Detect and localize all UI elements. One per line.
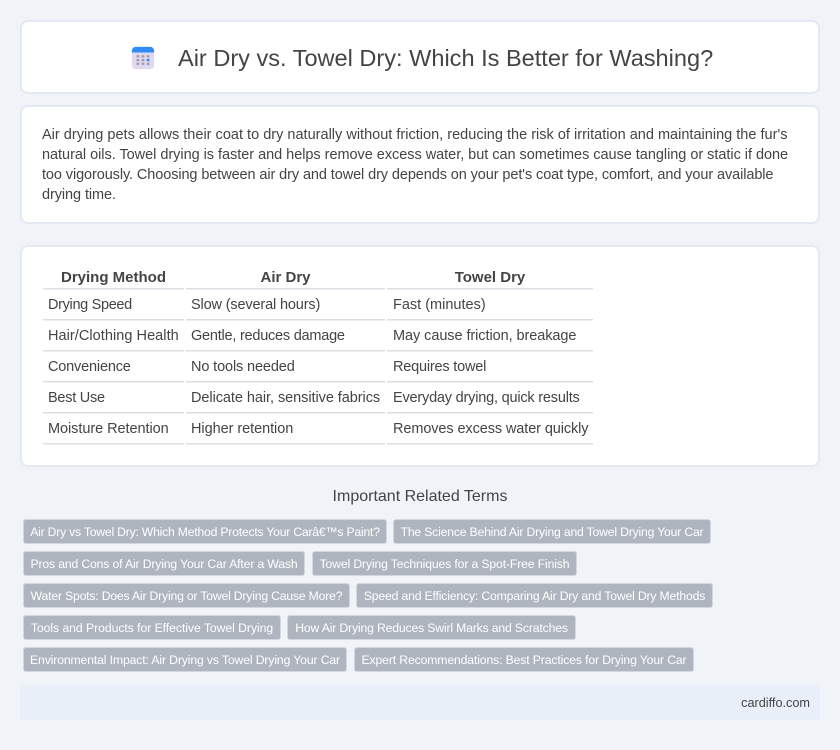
row: hair/clothing health: Hair/Clothing Health	[48, 328, 179, 344]
related terms tags	[23, 519, 713, 672]
description text: drying time.	[42, 187, 116, 203]
panel: comparison table: Fast (minutes)	[393, 297, 486, 313]
row: best use: Best Use	[48, 390, 105, 406]
panel: comparison table: No tools needed	[191, 359, 295, 375]
header: air dry: Air Dry	[260, 269, 311, 286]
tag	[23, 519, 387, 544]
panel: comparison table: Everyday drying, quick results	[393, 390, 580, 406]
panel: comparison table	[20, 245, 820, 467]
row: convenience: Convenience	[48, 359, 131, 375]
tag: The Science Behind Air Drying and Towel Drying Your Car	[401, 525, 703, 539]
panel: comparison table: Delicate hair, sensitive fabrics	[191, 390, 380, 406]
description text	[42, 127, 788, 203]
tag: Environmental Impact: Air Drying vs Towel Drying Your Car	[30, 653, 340, 667]
heading: important related terms: Important Related Terms	[333, 488, 507, 505]
tag: Water Spots: Does Air Drying or Towel Drying Cause More?	[31, 589, 342, 603]
tag: Speed and Efficiency: Comparing Air Dry and Towel Dry Methods	[364, 589, 705, 603]
panel: comparison table: Gentle, reduces damage	[191, 328, 345, 344]
tag	[356, 583, 713, 608]
tag: Air Dry vs Towel Dry: Which Method Protects Your Carâ€™s Paint?	[30, 525, 380, 539]
header: towel dry: Towel Dry	[455, 269, 525, 286]
panel: comparison table: May cause friction, breakage	[393, 328, 576, 344]
description text: too vigorously. Choosing between air dry and towel dry depends on your pet's coat type, comfort, and your available	[42, 167, 773, 183]
tag: Pros and Cons of Air Drying Your Car After a Wash	[30, 557, 298, 571]
tag	[287, 615, 576, 640]
tag	[393, 519, 711, 544]
icon: calendar	[132, 46, 154, 70]
tag	[23, 615, 281, 640]
panel: description	[20, 105, 820, 224]
panel: comparison table: Slow (several hours)	[191, 297, 320, 313]
tag	[23, 647, 347, 672]
title: Air Dry vs. Towel Dry: Which Is Better for Washing?	[178, 45, 713, 71]
tag: Expert Recommendations: Best Practices for Drying Your Car	[362, 653, 686, 667]
panel: comparison table: Removes excess water quickly	[393, 421, 588, 437]
tag: Towel Drying Techniques for a Spot-Free Finish	[320, 557, 569, 571]
tag: Tools and Products for Effective Towel Drying	[31, 621, 273, 635]
description text: natural oils. Towel drying is faster and helps remove excess water, but can sometimes cause tangling or static if done	[42, 147, 788, 163]
row: moisture retention: Moisture Retention	[48, 421, 169, 437]
row: drying speed: Drying Speed	[48, 297, 132, 313]
description text: Air drying pets allows their coat to dry naturally without friction, reducing the risk of irritation and maintaining the fur's	[42, 127, 788, 143]
tag: How Air Drying Reduces Swirl Marks and Scratches	[295, 621, 568, 635]
tag	[354, 647, 694, 672]
footer	[20, 686, 820, 720]
tag	[23, 583, 350, 608]
header: drying method: Drying Method	[61, 269, 166, 286]
footer site name: cardiffo.com	[741, 696, 810, 710]
panel: comparison table: Requires towel	[393, 359, 486, 375]
tag	[312, 551, 577, 576]
panel: comparison table: Higher retention	[191, 421, 293, 437]
tag	[23, 551, 305, 576]
panel: header	[20, 20, 820, 94]
